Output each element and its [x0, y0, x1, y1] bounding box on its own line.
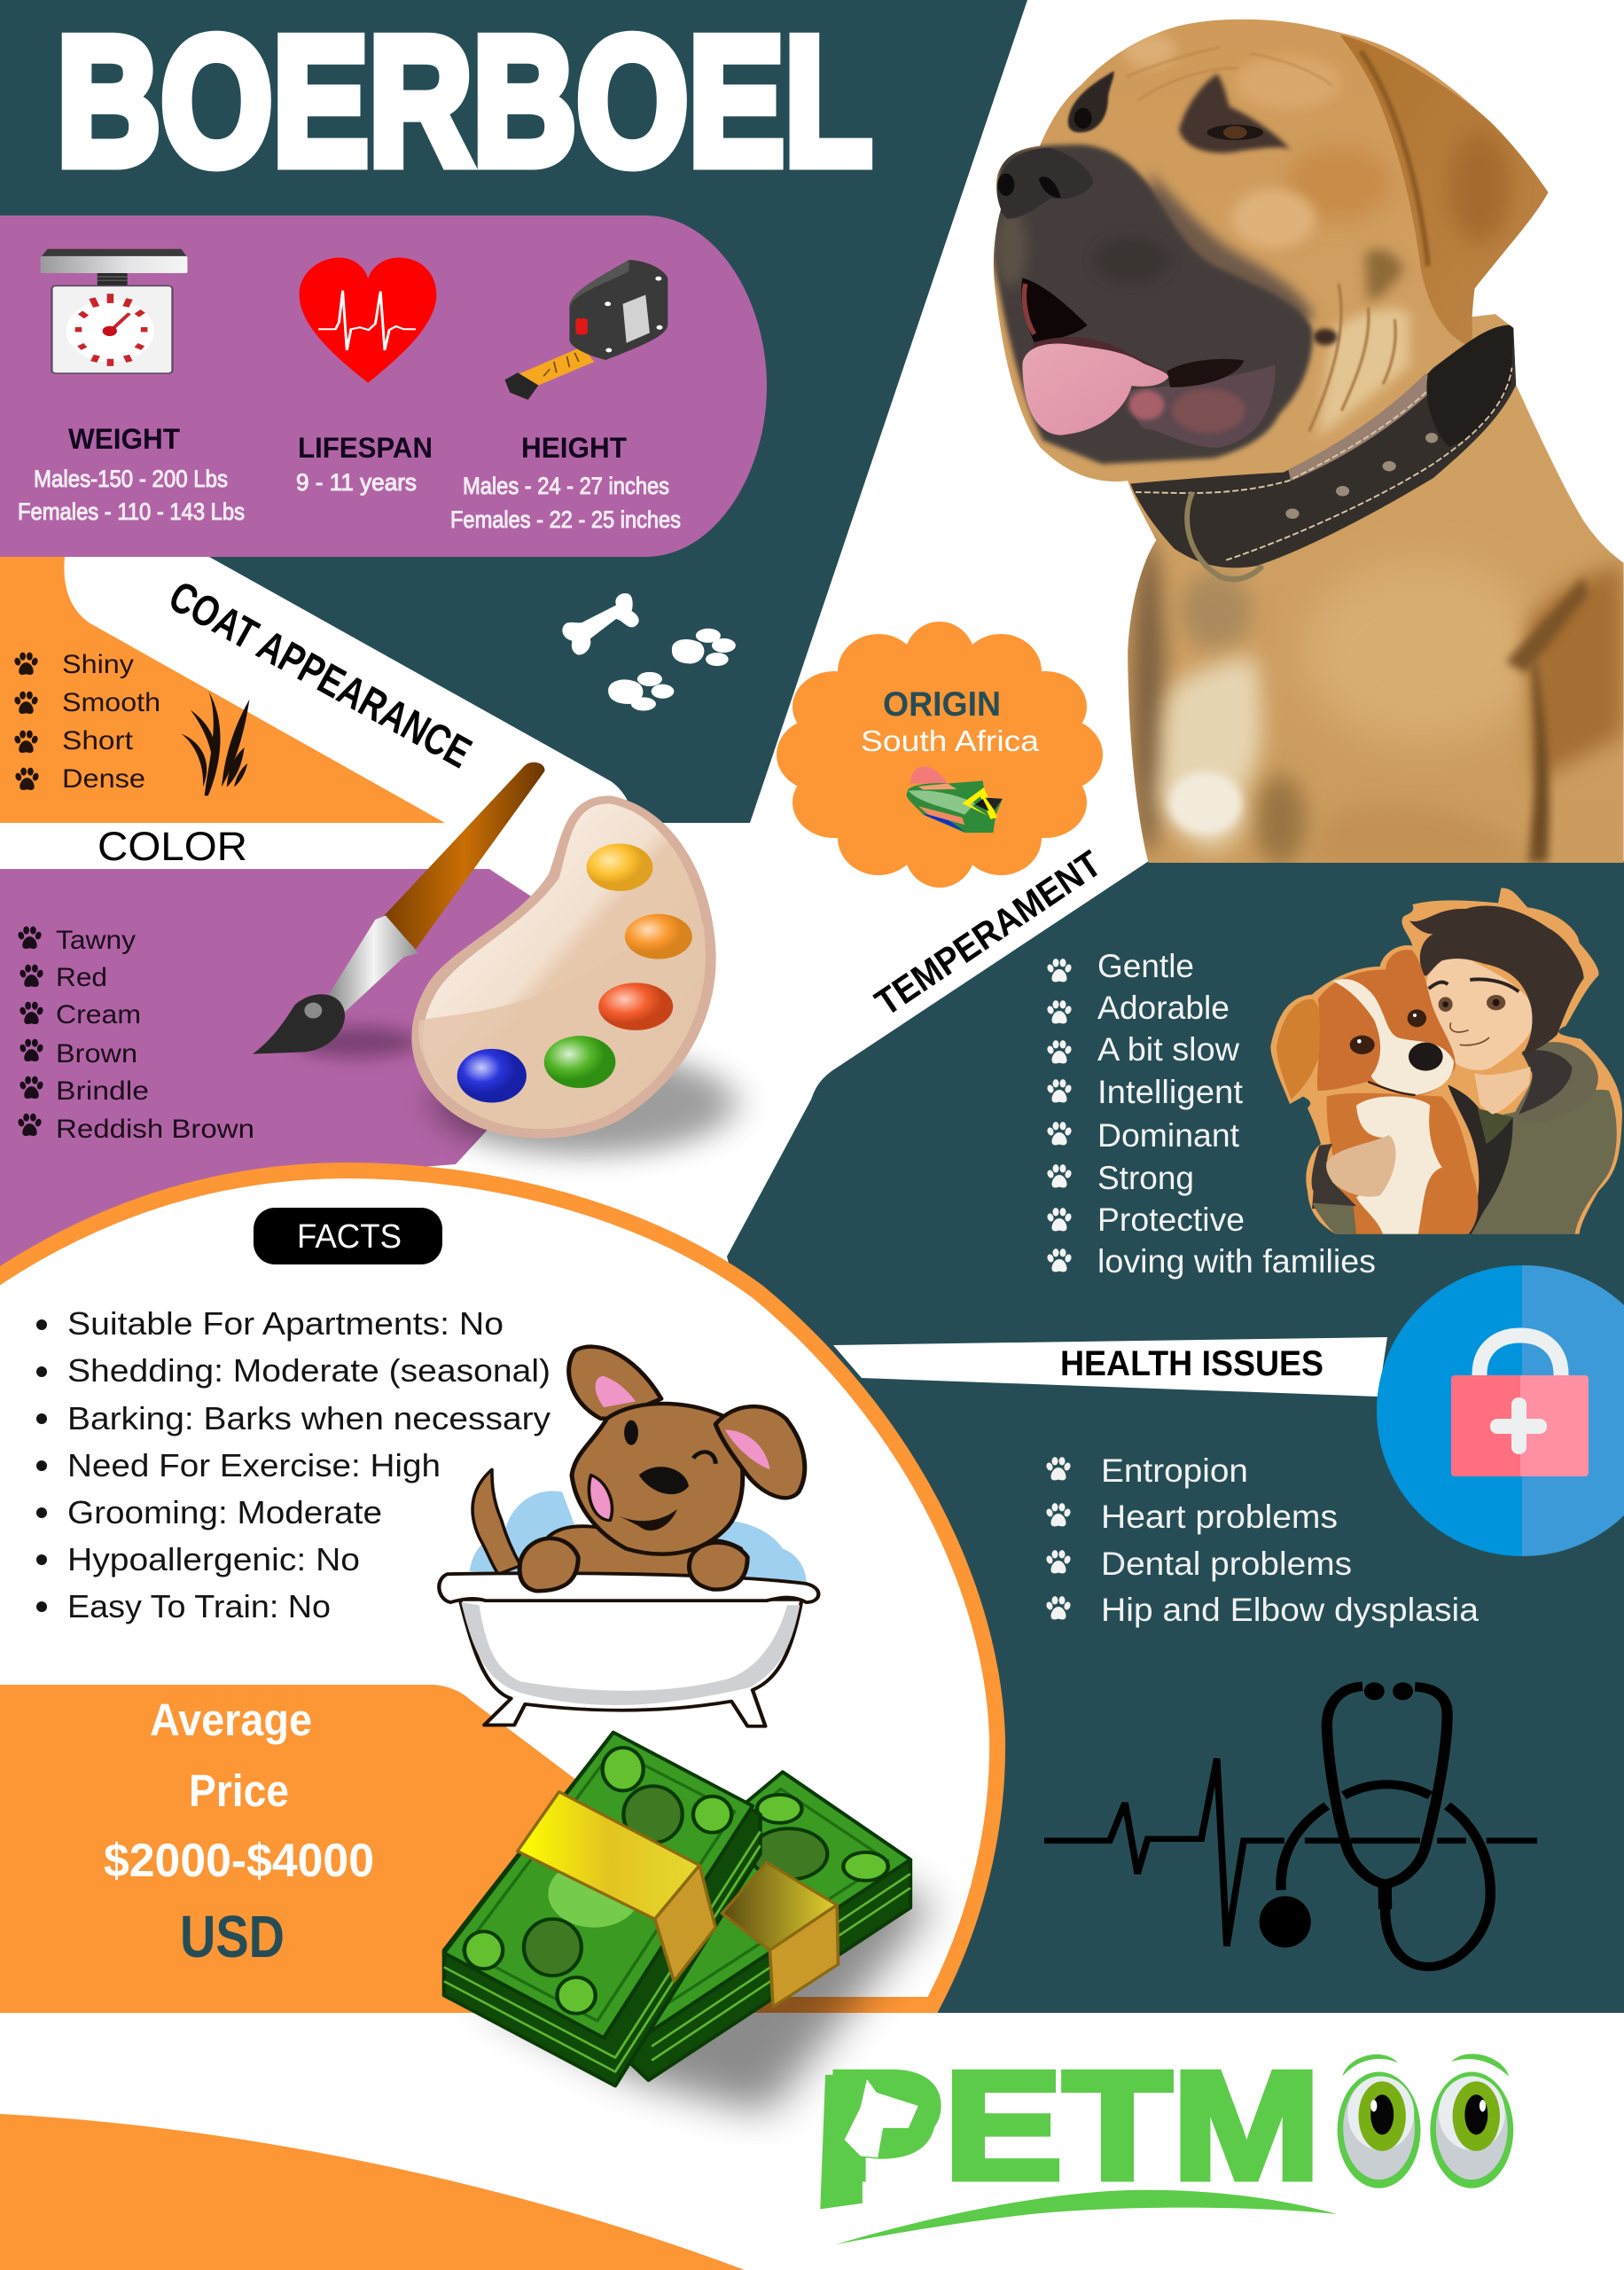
- list: colors: Tawny: [56, 926, 136, 955]
- text: south africa: South Africa: [861, 724, 1040, 757]
- logo: right eye: [1430, 2054, 1513, 2188]
- heading: temperament: TEMPERAMENT: [868, 842, 1109, 1023]
- nose: [997, 148, 1093, 219]
- text: weight: [18, 423, 245, 525]
- list: coat appearance: Smooth: [62, 688, 160, 717]
- text: lifespan: LIFESPAN: [298, 432, 433, 464]
- collar: [1130, 325, 1516, 568]
- head: [572, 1404, 743, 1554]
- panel: coat appearance orange: [0, 557, 445, 823]
- panel: temperament and health teal: [727, 861, 1624, 2013]
- left chest dark: [1132, 537, 1165, 854]
- list: coat appearance: Shiny: [62, 650, 134, 679]
- left ear: [569, 1347, 661, 1419]
- text: lifespan: [296, 432, 433, 496]
- logo: swoosh: [835, 2190, 1338, 2244]
- title: BOERBOEL: [57, 0, 872, 203]
- banner: health issues: HEALTH ISSUES: [1060, 1344, 1323, 1383]
- heading: coat appearance: COAT APPEARANCE: [161, 572, 479, 778]
- face: [1427, 957, 1534, 1070]
- icon: grass: [181, 692, 249, 795]
- tail: [472, 1469, 520, 1574]
- banner: health issues: [833, 1337, 1387, 1397]
- neck light: [1318, 309, 1409, 437]
- list: colors: [17, 926, 254, 1144]
- list: facts: Hypoallergenic: No: [67, 1541, 360, 1577]
- logo: petmoo: [820, 2039, 1513, 2244]
- text: height: HEIGHT: [521, 432, 627, 464]
- back bundle: [600, 1772, 910, 2080]
- dog ear: [1277, 999, 1323, 1100]
- muzzle: [994, 145, 1313, 464]
- text: height: Males - 24 - 27 inches: [463, 473, 669, 499]
- text: average price: Average: [150, 1695, 312, 1745]
- list: temperament: Intelligent: [1097, 1074, 1244, 1110]
- panel: facts semicircle: [0, 1170, 997, 2005]
- list: facts: Barking: Barks when necessary: [67, 1400, 550, 1436]
- text: height: [450, 432, 681, 533]
- right ear: [715, 1406, 805, 1498]
- icon: weighing scale: [41, 249, 187, 373]
- list: health issues: Entropion: [1101, 1452, 1248, 1489]
- front money band: [518, 1792, 699, 1919]
- list: temperament: Gentle: [1097, 948, 1194, 984]
- facial features: [1429, 979, 1519, 991]
- hood: [1513, 1042, 1598, 1123]
- list: health issues: Dental problems: [1101, 1546, 1352, 1582]
- list: temperament: Dominant: [1097, 1117, 1240, 1154]
- icon: heart with pulse: [300, 257, 436, 383]
- pill: facts heading: FACTS: [297, 1218, 402, 1256]
- chest white: [1158, 658, 1261, 849]
- icon: bone: [562, 593, 639, 654]
- body: [530, 1526, 741, 1577]
- illustration: stacks of money: [444, 1733, 933, 2114]
- text: weight: Females - 110 - 143 Lbs: [18, 498, 245, 525]
- list: coat appearance: Short: [62, 726, 134, 755]
- muzzle soft edge: [1150, 171, 1315, 337]
- neck: [1474, 1067, 1531, 1115]
- inner jacket: [1448, 1084, 1513, 1234]
- forehead highlights: [1123, 33, 1176, 68]
- text: weight: Males-150 - 200 Lbs: [34, 466, 228, 492]
- list: temperament: Protective: [1097, 1202, 1245, 1238]
- list: health issues: Hip and Elbow dysplasia: [1101, 1592, 1479, 1628]
- list: colors: Cream: [56, 1000, 141, 1029]
- open mouth: [1021, 278, 1088, 343]
- logo: petmoo: PETM: [824, 2039, 1321, 2211]
- dog head: [1317, 950, 1456, 1095]
- icon: paw print lower: [608, 672, 674, 711]
- list: coat appearance: [13, 650, 160, 794]
- dog blaze: [1332, 979, 1454, 1095]
- dog chest: [1356, 1096, 1442, 1234]
- text: origin: ORIGIN: [883, 685, 1001, 724]
- list: facts: Shedding: Moderate (seasonal): [67, 1352, 550, 1389]
- jacket: [1472, 1090, 1617, 1234]
- left eye patch: [1068, 71, 1114, 132]
- icon: stethoscope with heartbeat: [1044, 1682, 1537, 1967]
- text: average price: USD: [180, 1904, 285, 1970]
- list: coat appearance: Dense: [62, 764, 145, 794]
- right eye patch: [1179, 74, 1292, 153]
- logo: dog silhouette: [845, 2079, 918, 2157]
- icon: paw print upper: [672, 629, 736, 666]
- list: health issues: Heart problems: [1101, 1499, 1338, 1535]
- head details: [994, 33, 1409, 464]
- list: temperament: [1046, 948, 1376, 1280]
- panel: color purple: [0, 869, 638, 1295]
- panel: stats purple: [0, 215, 767, 557]
- photo: boerboel dog: [988, 0, 1624, 865]
- ear: [1340, 35, 1548, 346]
- list: facts: Suitable For Apartments: No: [67, 1305, 504, 1342]
- list: colors: Reddish Brown: [56, 1115, 254, 1144]
- back money band: [722, 1862, 837, 1950]
- list: temperament: A bit slow: [1097, 1031, 1239, 1068]
- pill: facts heading: [254, 1208, 442, 1264]
- list: facts: Grooming: Moderate: [67, 1494, 382, 1530]
- list: colors: Red: [56, 963, 107, 992]
- logo: letter P body: [820, 2075, 936, 2209]
- panel: top teal background: [0, 0, 1027, 823]
- icon: measuring tape: [504, 260, 668, 400]
- face: [624, 1421, 638, 1445]
- text: height: Females - 22 - 25 inches: [450, 506, 681, 533]
- shadow: [486, 1854, 933, 2114]
- dog body: [1327, 1093, 1478, 1234]
- text: lifespan: 9 - 11 years: [296, 469, 417, 496]
- list: temperament: Strong: [1097, 1160, 1194, 1196]
- tongue: [1022, 344, 1168, 435]
- icon: palette and brush: [253, 763, 735, 1155]
- shoulder tone: [1304, 560, 1542, 741]
- ear: [1535, 996, 1558, 1026]
- list: facts: Need For Exercise: High: [67, 1447, 441, 1483]
- list: facts: [36, 1305, 550, 1624]
- hair: [1409, 906, 1584, 1055]
- paws: [519, 1538, 578, 1591]
- icon: south africa flag map: [906, 766, 1003, 833]
- shape: bottom orange wedge: [0, 2114, 745, 2270]
- badge: origin flower: [777, 622, 1103, 888]
- boy hand and sleeve: [1312, 1144, 1356, 1209]
- panel: average price orange: [0, 1685, 780, 2013]
- list: facts: Easy To Train: No: [67, 1588, 331, 1624]
- text: average price: [104, 1695, 374, 1970]
- tub: [460, 1600, 801, 1726]
- list: colors: Brown: [56, 1039, 137, 1068]
- logo: left eye: [1338, 2055, 1420, 2188]
- list: temperament: loving with families: [1097, 1243, 1376, 1280]
- text: average price: Price: [189, 1765, 289, 1816]
- list: colors: Brindle: [56, 1076, 149, 1106]
- text: weight: WEIGHT: [68, 423, 180, 455]
- icon: medical bag circle: [1377, 1265, 1624, 1556]
- front bundle: [444, 1733, 761, 2086]
- illustration: boy hugging dog: [1270, 888, 1622, 1234]
- text: average price: $2000-$4000: [104, 1835, 374, 1887]
- foam: [470, 1491, 807, 1588]
- lower jaw: [1128, 365, 1275, 448]
- list: health issues: [1045, 1452, 1479, 1628]
- list: temperament: Adorable: [1097, 990, 1230, 1026]
- heading: color: COLOR: [98, 824, 247, 869]
- illustration: puppy in bathtub: [439, 1347, 818, 1726]
